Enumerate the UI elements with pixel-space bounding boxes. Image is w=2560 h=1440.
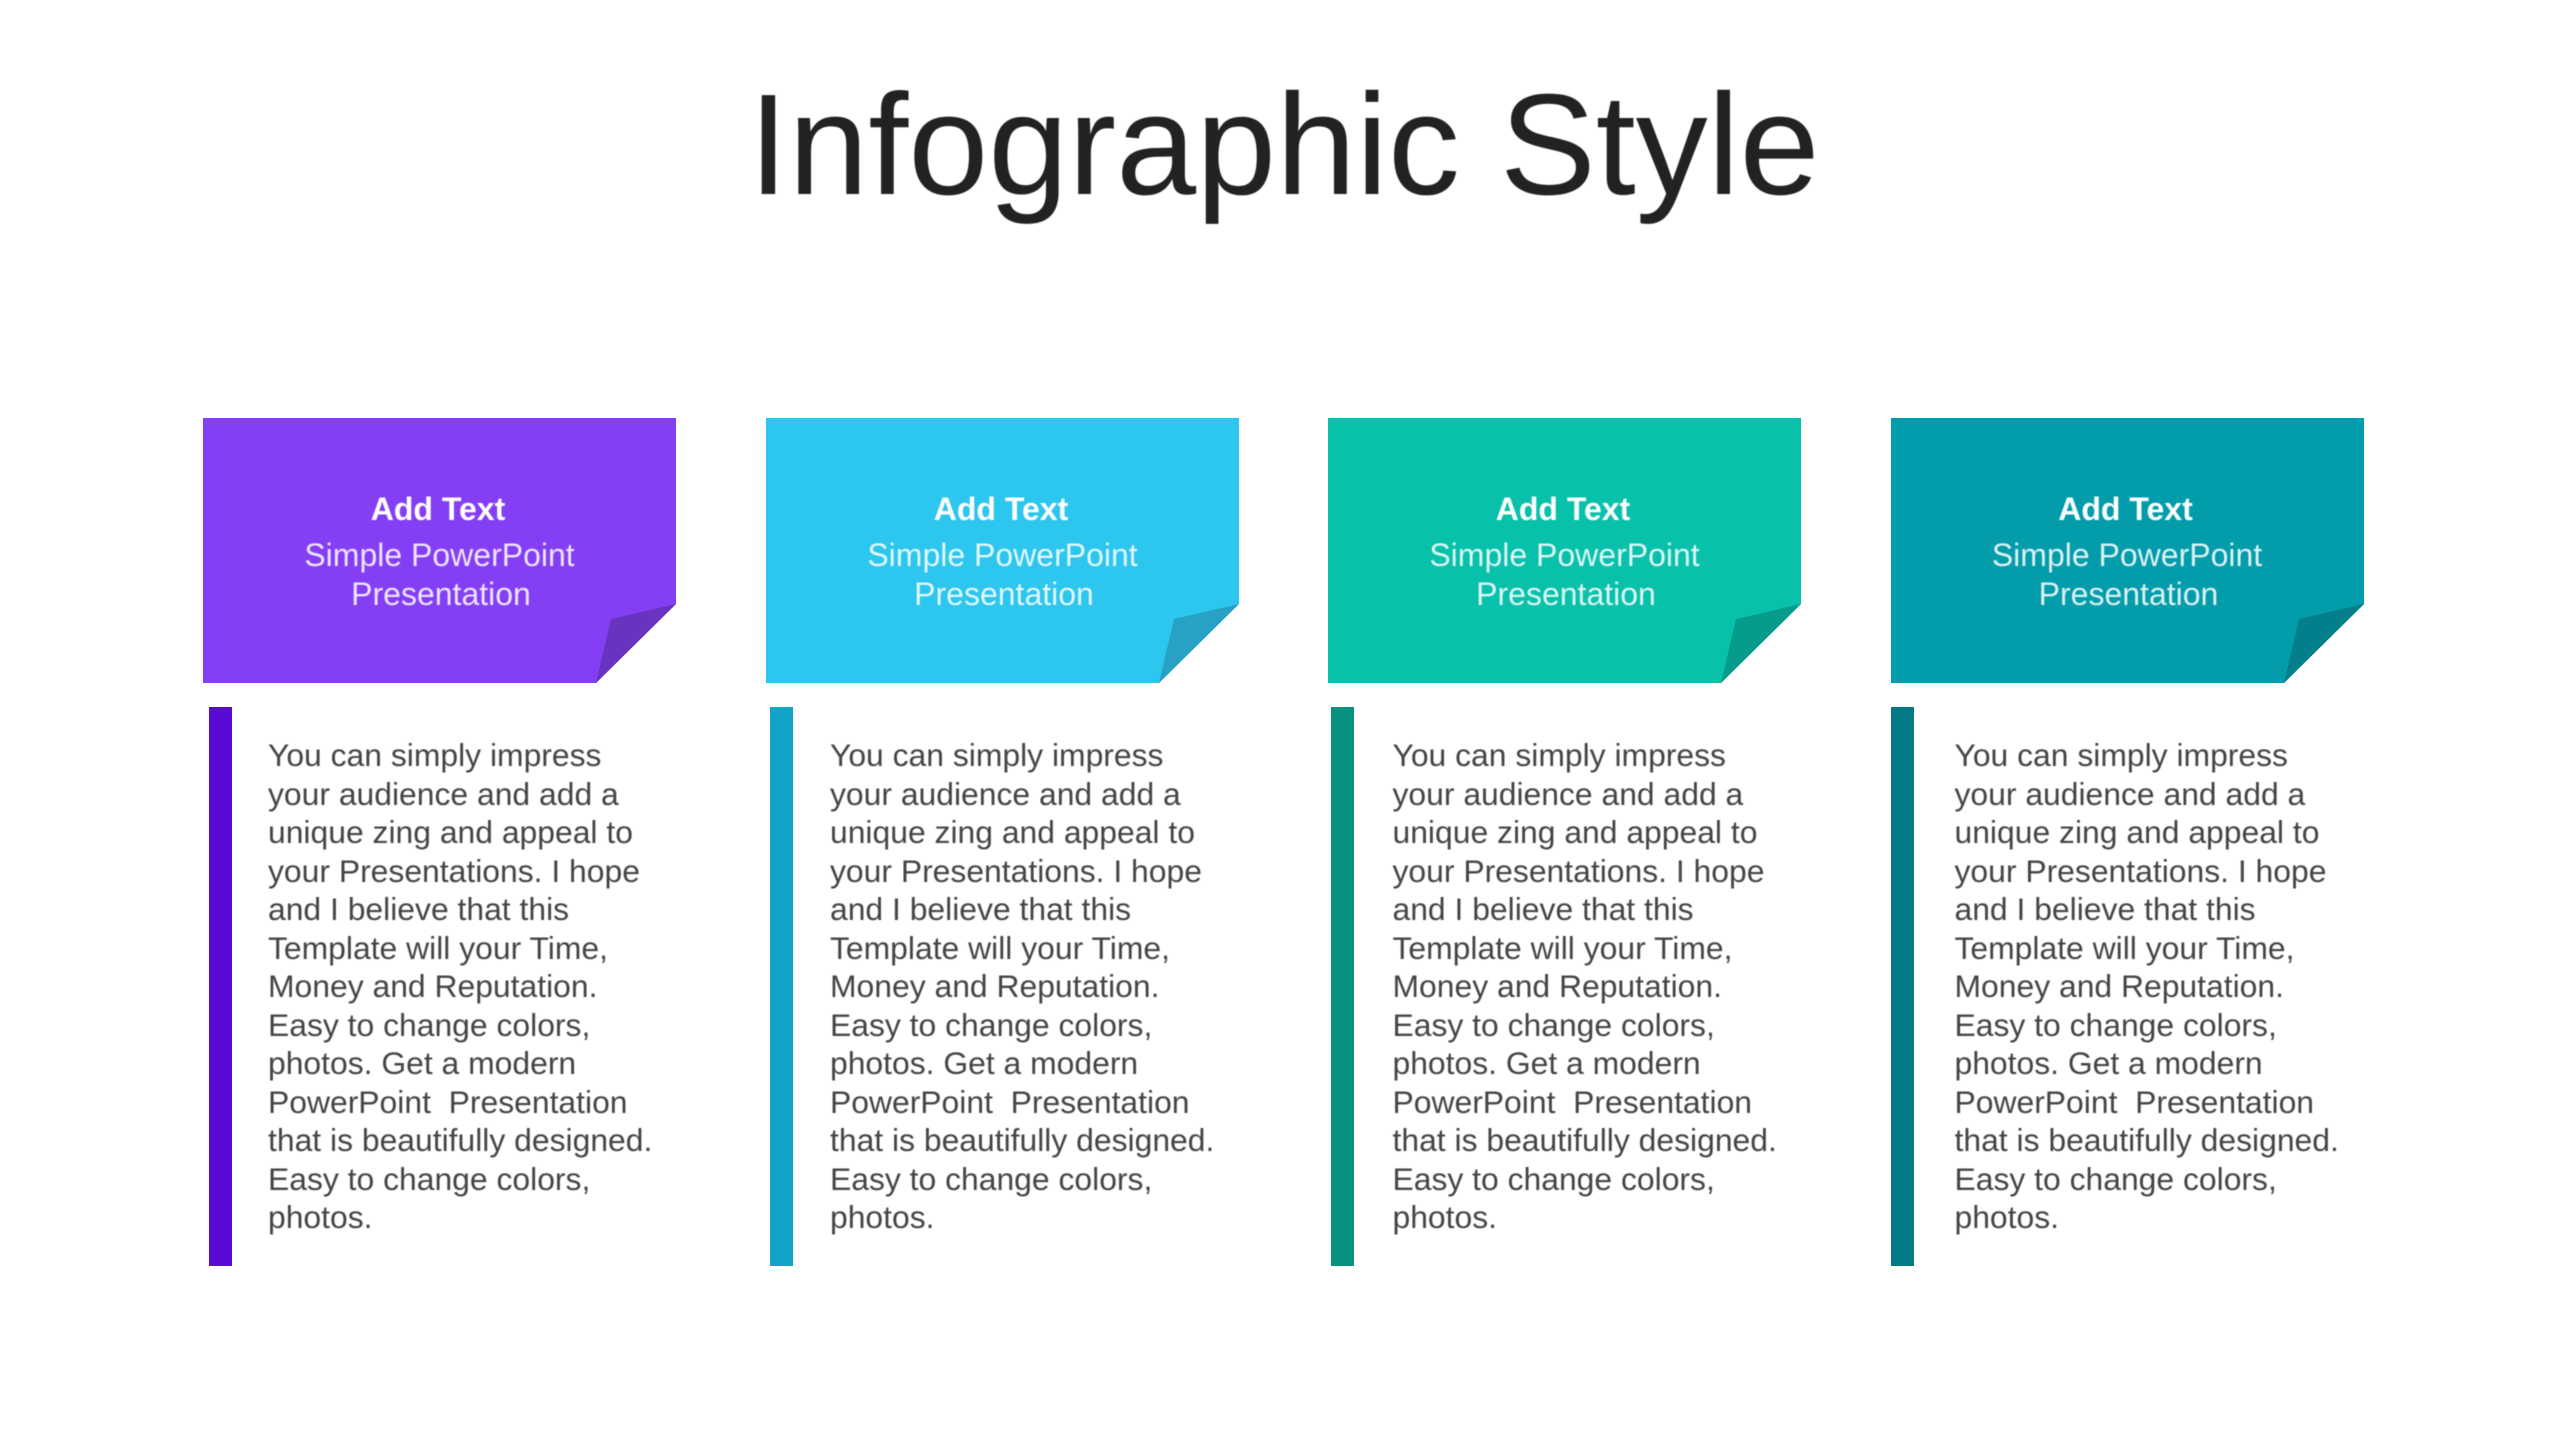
text block: description 2: that is beautifully designed. — [830, 1122, 1214, 1158]
card: teal folded note: Simple PowerPoint — [1992, 537, 2262, 573]
text block: description 2: photos. Get a modern — [830, 1045, 1138, 1081]
text block: description 1: Money and Reputation. — [268, 968, 597, 1004]
card: green folded note: Presentation — [1476, 576, 1656, 612]
text block: description 4: your audience and add a — [1954, 776, 2305, 812]
text block: description 1: that is beautifully designed. — [268, 1122, 652, 1158]
text block: description 4: unique zing and appeal to — [1954, 814, 2319, 850]
text block: description 2: unique zing and appeal to — [830, 814, 1195, 850]
text block: description 1: and I believe that this — [268, 891, 569, 927]
card: teal folded note: Add Text — [2058, 491, 2193, 527]
text block: description 2: your Presentations. I hope — [830, 852, 1202, 888]
text block: description 4: PowerPoint Presentation — [1954, 1084, 2314, 1120]
text block: description 3: Template will your Time, — [1392, 930, 1732, 966]
accent bar: teal — [1890, 707, 1914, 1266]
text block: description 4: and I believe that this — [1954, 891, 2256, 927]
text block: description 2: photos. — [830, 1199, 935, 1235]
text block: description 4: Money and Reputation. — [1954, 968, 2284, 1004]
text block: description 3: Easy to change colors, — [1392, 1006, 1715, 1042]
text block: description 4: your Presentations. I hope — [1954, 852, 2326, 888]
text block: description 2 — [830, 737, 1214, 1236]
card: green folded note: Add Text — [1496, 491, 1630, 527]
text block: description 4: Easy to change colors, — [1954, 1160, 2277, 1196]
panel: column 1 purple — [203, 418, 676, 1266]
text block: description 3: photos. — [1392, 1199, 1497, 1235]
text block: description 3: You can simply impress — [1392, 737, 1726, 773]
text block: description 4: You can simply impress — [1954, 737, 2288, 773]
text block: description 1: your audience and add a — [268, 776, 619, 812]
text block: description 3: Easy to change colors, — [1392, 1160, 1715, 1196]
card: cyan folded note: Simple PowerPoint — [867, 537, 1138, 573]
text block: description 2: You can simply impress — [830, 737, 1163, 773]
text block: description 4: photos. — [1954, 1199, 2059, 1235]
card: purple folded note: Add Text — [371, 491, 505, 527]
text block: description 2: Money and Reputation. — [830, 968, 1159, 1004]
text block: description 2: Template will your Time, — [830, 930, 1170, 966]
card: cyan folded note: Add Text — [934, 491, 1068, 527]
text block: description 3: your audience and add a — [1392, 776, 1743, 812]
text block: description 4: Template will your Time, — [1954, 930, 2294, 966]
text block: description 3: PowerPoint Presentation — [1392, 1084, 1752, 1120]
card: green folded note: Simple PowerPoint — [1429, 537, 1700, 573]
text block: description 1: photos. Get a modern — [268, 1045, 576, 1081]
text block: description 1: photos. — [268, 1199, 373, 1235]
card: teal folded note — [1891, 418, 2364, 683]
card: purple folded note: Simple PowerPoint — [304, 537, 575, 573]
text block: description 3: and I believe that this — [1392, 891, 1694, 927]
text block: description 2: and I believe that this — [830, 891, 1131, 927]
text block: description 1: your Presentations. I hope — [268, 852, 640, 888]
text block: description 3: photos. Get a modern — [1392, 1045, 1701, 1081]
panel: column 4 teal — [1891, 418, 2364, 1266]
card: cyan folded note — [766, 418, 1239, 683]
text block: description 1: You can simply impress — [268, 737, 601, 773]
text block: description 3: unique zing and appeal to — [1392, 814, 1757, 850]
text block: description 3: your Presentations. I hope — [1392, 852, 1764, 888]
text block: description 4 — [1954, 737, 2339, 1236]
card: cyan folded note: Presentation — [914, 576, 1094, 612]
title: Infographic Style — [748, 65, 1820, 225]
panel: column 3 green — [1328, 418, 1801, 1266]
accent bar: cyan — [770, 707, 793, 1266]
text block: description 1: Template will your Time, — [268, 930, 608, 966]
text block: description 1 — [268, 737, 652, 1236]
text block: description 2: your audience and add a — [830, 776, 1181, 812]
text block: description 2: Easy to change colors, — [830, 1006, 1152, 1042]
text block: description 1: PowerPoint Presentation — [268, 1084, 628, 1120]
text block: description 4: Easy to change colors, — [1954, 1006, 2277, 1042]
card: green folded note — [1328, 418, 1801, 683]
text block: description 1: Easy to change colors, — [268, 1160, 590, 1196]
text block: description 3: that is beautifully designed. — [1392, 1122, 1777, 1158]
text block: description 1: unique zing and appeal to — [268, 814, 633, 850]
text block: description 4: photos. Get a modern — [1954, 1045, 2263, 1081]
text block: description 2: PowerPoint Presentation — [830, 1084, 1190, 1120]
accent bar: purple — [209, 707, 232, 1266]
text block: description 2: Easy to change colors, — [830, 1160, 1152, 1196]
text block: description 4: that is beautifully designed. — [1954, 1122, 2339, 1158]
text block: description 3 — [1392, 737, 1777, 1236]
text block: description 3: Money and Reputation. — [1392, 968, 1722, 1004]
card: purple folded note: Presentation — [351, 576, 531, 612]
card: purple folded note — [203, 418, 676, 683]
panel: column 2 cyan — [766, 418, 1239, 1266]
card: teal folded note: Presentation — [2039, 576, 2218, 612]
text block: description 1: Easy to change colors, — [268, 1006, 590, 1042]
accent bar: green — [1331, 707, 1354, 1266]
